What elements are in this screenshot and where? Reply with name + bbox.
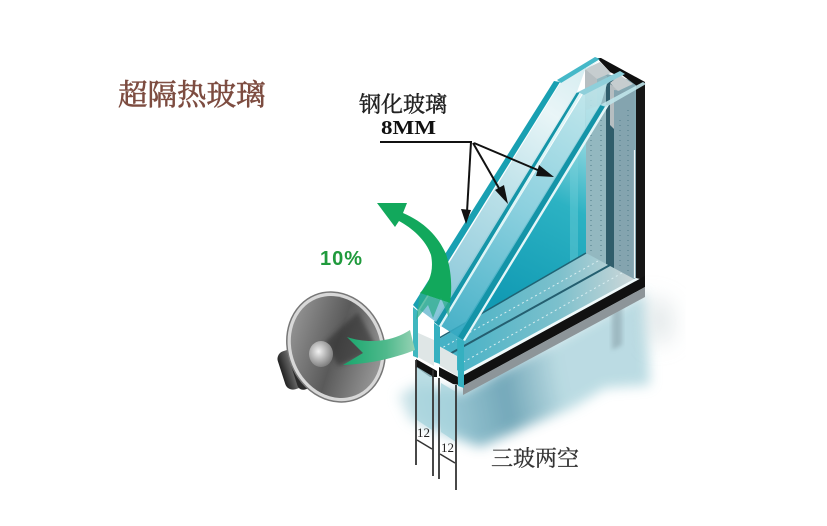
title: 超隔热玻璃: [118, 79, 266, 112]
label: tempered glass 8mm: 钢化玻璃: [359, 92, 447, 117]
label: tempered glass 8mm: [359, 92, 447, 139]
reflection under window: [398, 292, 672, 447]
dimension values: 12: [417, 425, 430, 440]
glass pane 1: [413, 57, 600, 322]
dimension values: 12: [441, 440, 454, 455]
bottom spacers: [434, 253, 636, 376]
dimension lines: [416, 360, 456, 490]
frame side spacers: [585, 68, 645, 285]
pane lower edges: [413, 307, 464, 442]
frame black edge: [636, 82, 645, 287]
leader arrows: [380, 142, 554, 224]
percent label: 10%: [320, 248, 362, 270]
green arrow: incoming sound: [343, 330, 415, 365]
spacer dots: [591, 100, 628, 275]
window frame: [434, 58, 645, 395]
bottom black band: [462, 276, 645, 386]
green arrow: reflected 10%: [377, 203, 451, 320]
frame top cap: [597, 58, 645, 86]
glass pane 2: [434, 71, 625, 337]
inner glass: [463, 105, 601, 336]
speaker: [271, 277, 401, 417]
bottom white edge: [461, 278, 640, 376]
glass pane 3: [457, 82, 646, 341]
dimension values: [417, 425, 454, 455]
label: tempered glass 8mm: 8MM: [381, 117, 436, 139]
caption: 三玻两空: [491, 446, 579, 471]
